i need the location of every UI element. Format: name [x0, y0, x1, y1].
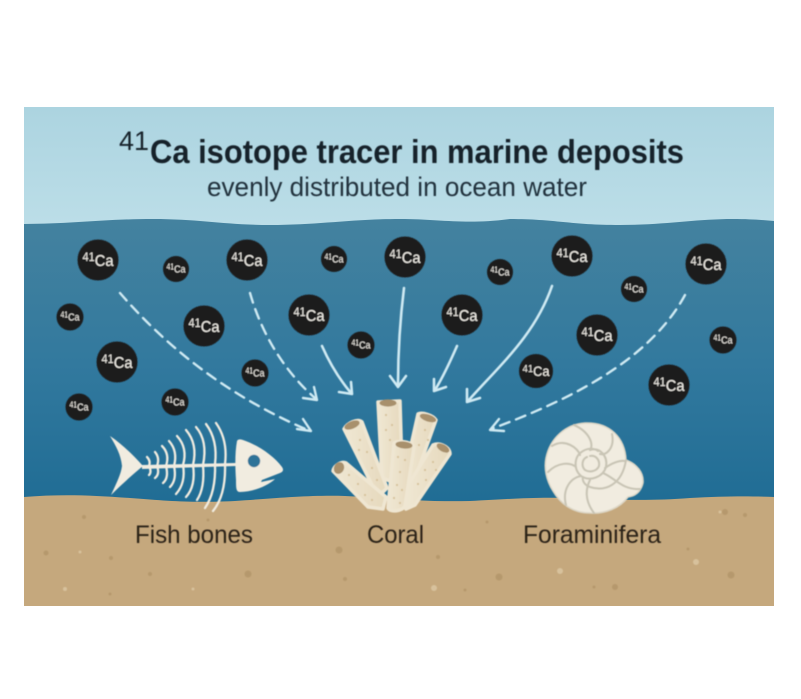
41Ca particles: Ca [569, 249, 588, 266]
41Ca particles: Ca [173, 396, 185, 408]
arrow: solid short to coral from right ball [434, 346, 457, 391]
arrow: solid to coral from left ball [322, 346, 352, 394]
41Ca particles: Ca [359, 340, 371, 352]
subtitle: evenly distributed in ocean water [207, 172, 587, 202]
arrow: dashed second from upper left [250, 293, 317, 400]
41Ca particles: 41 [70, 400, 78, 410]
41Ca particles: Ca [332, 254, 344, 266]
label: Coral: Coral [367, 521, 424, 549]
icon: foraminifera shell [545, 423, 643, 513]
41Ca particles: Ca [632, 284, 644, 296]
41Ca particles: 41 [166, 396, 174, 404]
arrow: dashed from far upper right [490, 295, 685, 431]
41Ca particles: Ca [114, 355, 133, 372]
41Ca particles: 41 [654, 375, 666, 389]
41Ca particles: Ca [253, 368, 265, 380]
41Ca particles: Ca [174, 264, 186, 276]
41Ca particles: Ca [703, 257, 722, 274]
41Ca particles: 41 [246, 366, 254, 376]
41Ca particles: 41 [352, 338, 360, 348]
41Ca particles: Ca [498, 266, 510, 278]
label: Fish bones: Fish bones [135, 521, 253, 549]
41Ca particles: 41 [294, 305, 306, 319]
panel: sky background [24, 107, 774, 227]
41Ca particles: 41 [102, 352, 114, 366]
41Ca particles: 41 [714, 334, 722, 342]
41Ca particles: 41 [446, 305, 459, 319]
41Ca particles: 41 [390, 247, 402, 261]
41Ca particles: 41 [624, 282, 633, 292]
41Ca particles: Ca [77, 402, 89, 414]
label: Foraminifera: Foraminifera [523, 521, 661, 549]
41Ca particles: 41 [232, 250, 244, 264]
41Ca particles: 41 [60, 310, 69, 320]
41Ca particles: 41 [490, 266, 499, 274]
arrow: solid curved from upper right [467, 286, 552, 402]
title: 41 [119, 126, 149, 156]
title: Ca isotope tracer in marine deposits [150, 133, 684, 170]
panel: ocean water [24, 219, 774, 510]
41Ca particles: Ca [95, 253, 114, 270]
41Ca particles: 41 [82, 250, 95, 264]
arrow: solid straight down to coral [390, 288, 406, 387]
panel: sand seabed [24, 495, 774, 606]
41Ca particles: Ca [306, 308, 325, 325]
41Ca particles: Ca [402, 250, 421, 267]
41Ca particles: Ca [459, 308, 478, 325]
41Ca particles: Ca [666, 378, 685, 395]
icon: coral [332, 399, 451, 511]
sand speckles [44, 509, 747, 596]
41Ca particles: 41 [522, 363, 533, 375]
icon: fish skeleton [110, 423, 283, 511]
41Ca particles: Ca [68, 312, 80, 324]
41Ca particles: Ca [533, 363, 550, 379]
41Ca particles: 41 [166, 262, 175, 272]
41Ca particles: 41 [690, 254, 703, 268]
arrow: dashed from upper left to coral [120, 293, 311, 431]
41Ca particles: Ca [594, 328, 613, 345]
41Ca particles: 41 [188, 316, 201, 330]
41Ca particles: Ca [244, 253, 263, 270]
41Ca particles: 41 [556, 246, 569, 260]
41Ca particles: Ca [201, 319, 220, 336]
41Ca particles: 41 [324, 252, 333, 262]
41Ca particles: 41 [582, 325, 594, 339]
41Ca particles [56, 236, 736, 420]
41Ca particles: Ca [721, 334, 733, 346]
